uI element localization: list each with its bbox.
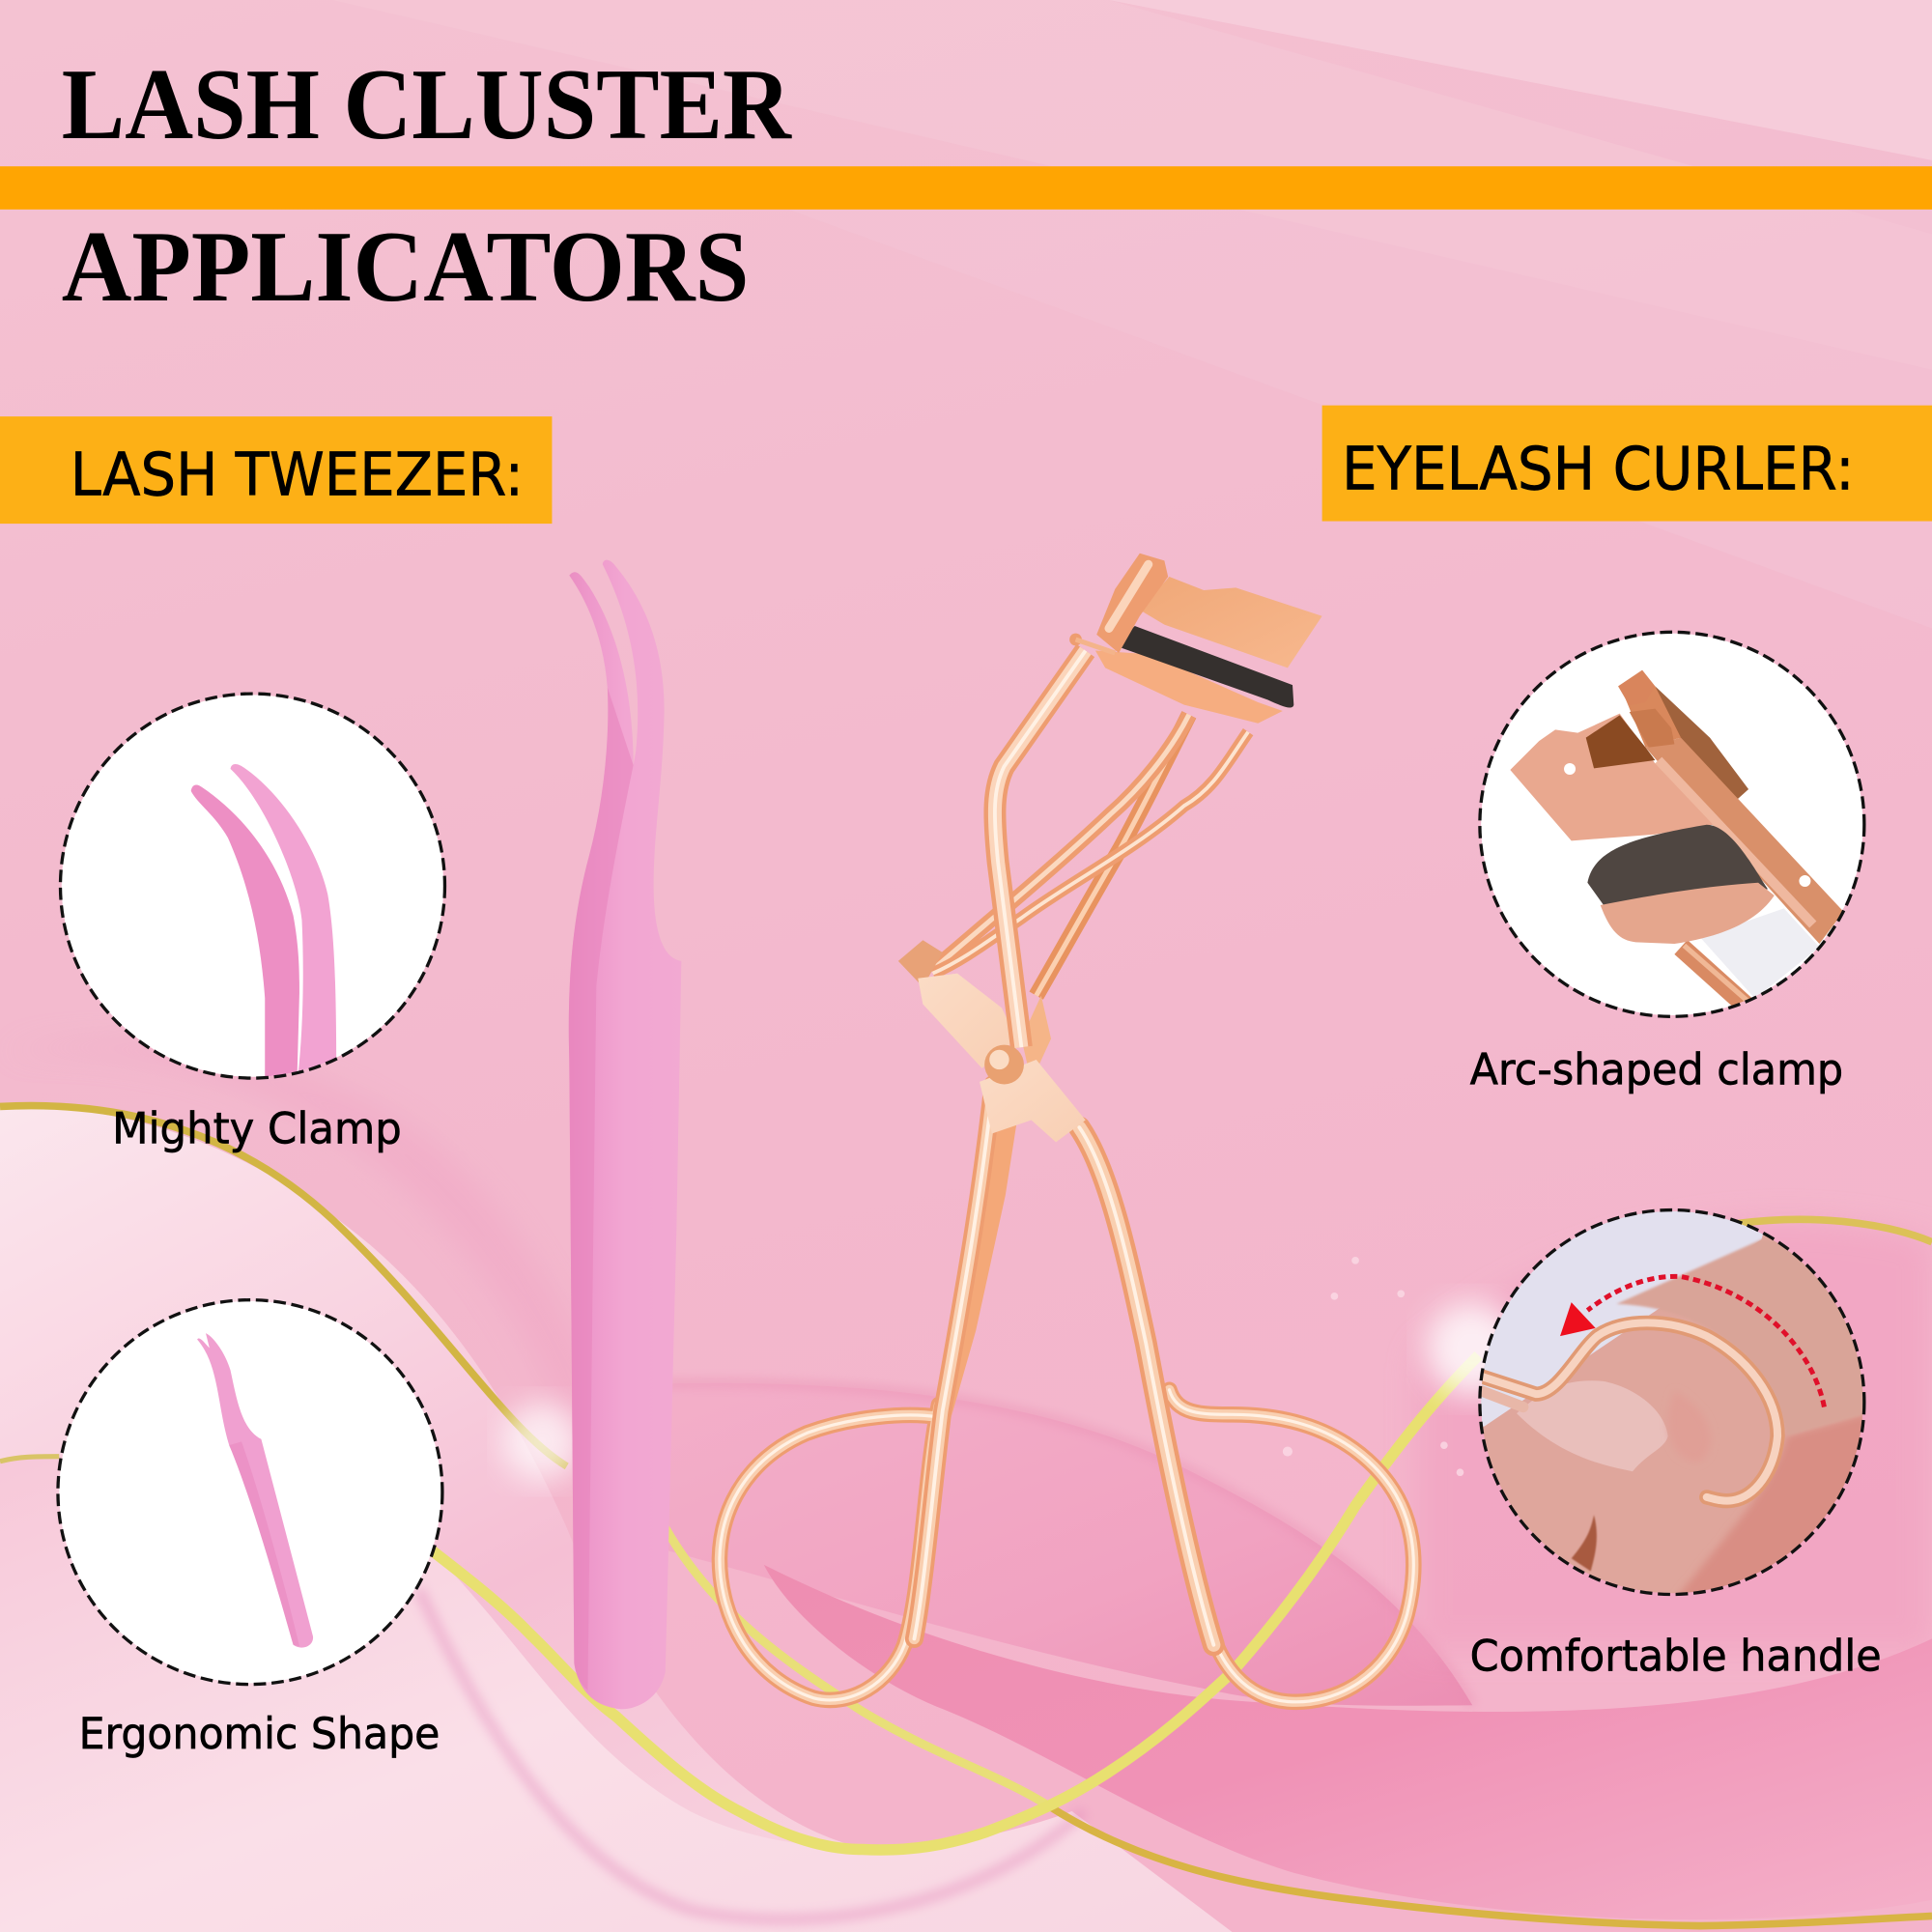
wave: right pink region <box>1417 1221 1932 1651</box>
curler hinge plates <box>918 974 1016 1068</box>
circle: mighty clamp detail <box>60 694 444 1084</box>
heading: lash tweezer <box>0 416 552 524</box>
wave: central panel <box>666 1383 1472 1706</box>
curler end cap <box>898 940 943 987</box>
curler clamp top <box>1069 554 1322 724</box>
title: line 2: APPLICATORS <box>62 211 750 323</box>
curler pivot <box>984 1045 1024 1084</box>
circle: comfortable handle detail <box>1468 1208 1867 1601</box>
circle: arc-shaped clamp detail <box>1480 632 1864 1016</box>
wave: pink glow above gold line <box>0 1040 640 1466</box>
wave: gold lines <box>0 1106 567 1466</box>
label: mighty clamp: Mighty Clamp <box>112 1104 402 1154</box>
mini tweezer <box>197 1333 313 1648</box>
wave: pale left region <box>0 1106 1109 1932</box>
label: ergonomic shape: Ergonomic Shape <box>79 1709 440 1759</box>
heading: eyelash curler: EYELASH CURLER: <box>1342 435 1855 503</box>
curler handles <box>720 1084 1413 1702</box>
wave: deep pink swoosh <box>764 1565 1932 1919</box>
heading: eyelash curler <box>1322 406 1932 522</box>
circle: ergonomic shape detail <box>58 1300 442 1685</box>
heading: lash tweezer: LASH TWEEZER: <box>71 441 524 510</box>
big pink tweezer <box>569 560 681 1709</box>
label: comfortable handle: Comfortable handle <box>1470 1632 1882 1682</box>
curler upper arms <box>933 715 1248 996</box>
eyelash curler <box>720 554 1413 1702</box>
label: arc-shaped clamp: Arc-shaped clamp <box>1470 1044 1843 1094</box>
orange divider bar <box>0 166 1932 210</box>
curler long left arm <box>995 650 1086 1047</box>
title: line 1: LASH CLUSTER <box>62 48 792 160</box>
